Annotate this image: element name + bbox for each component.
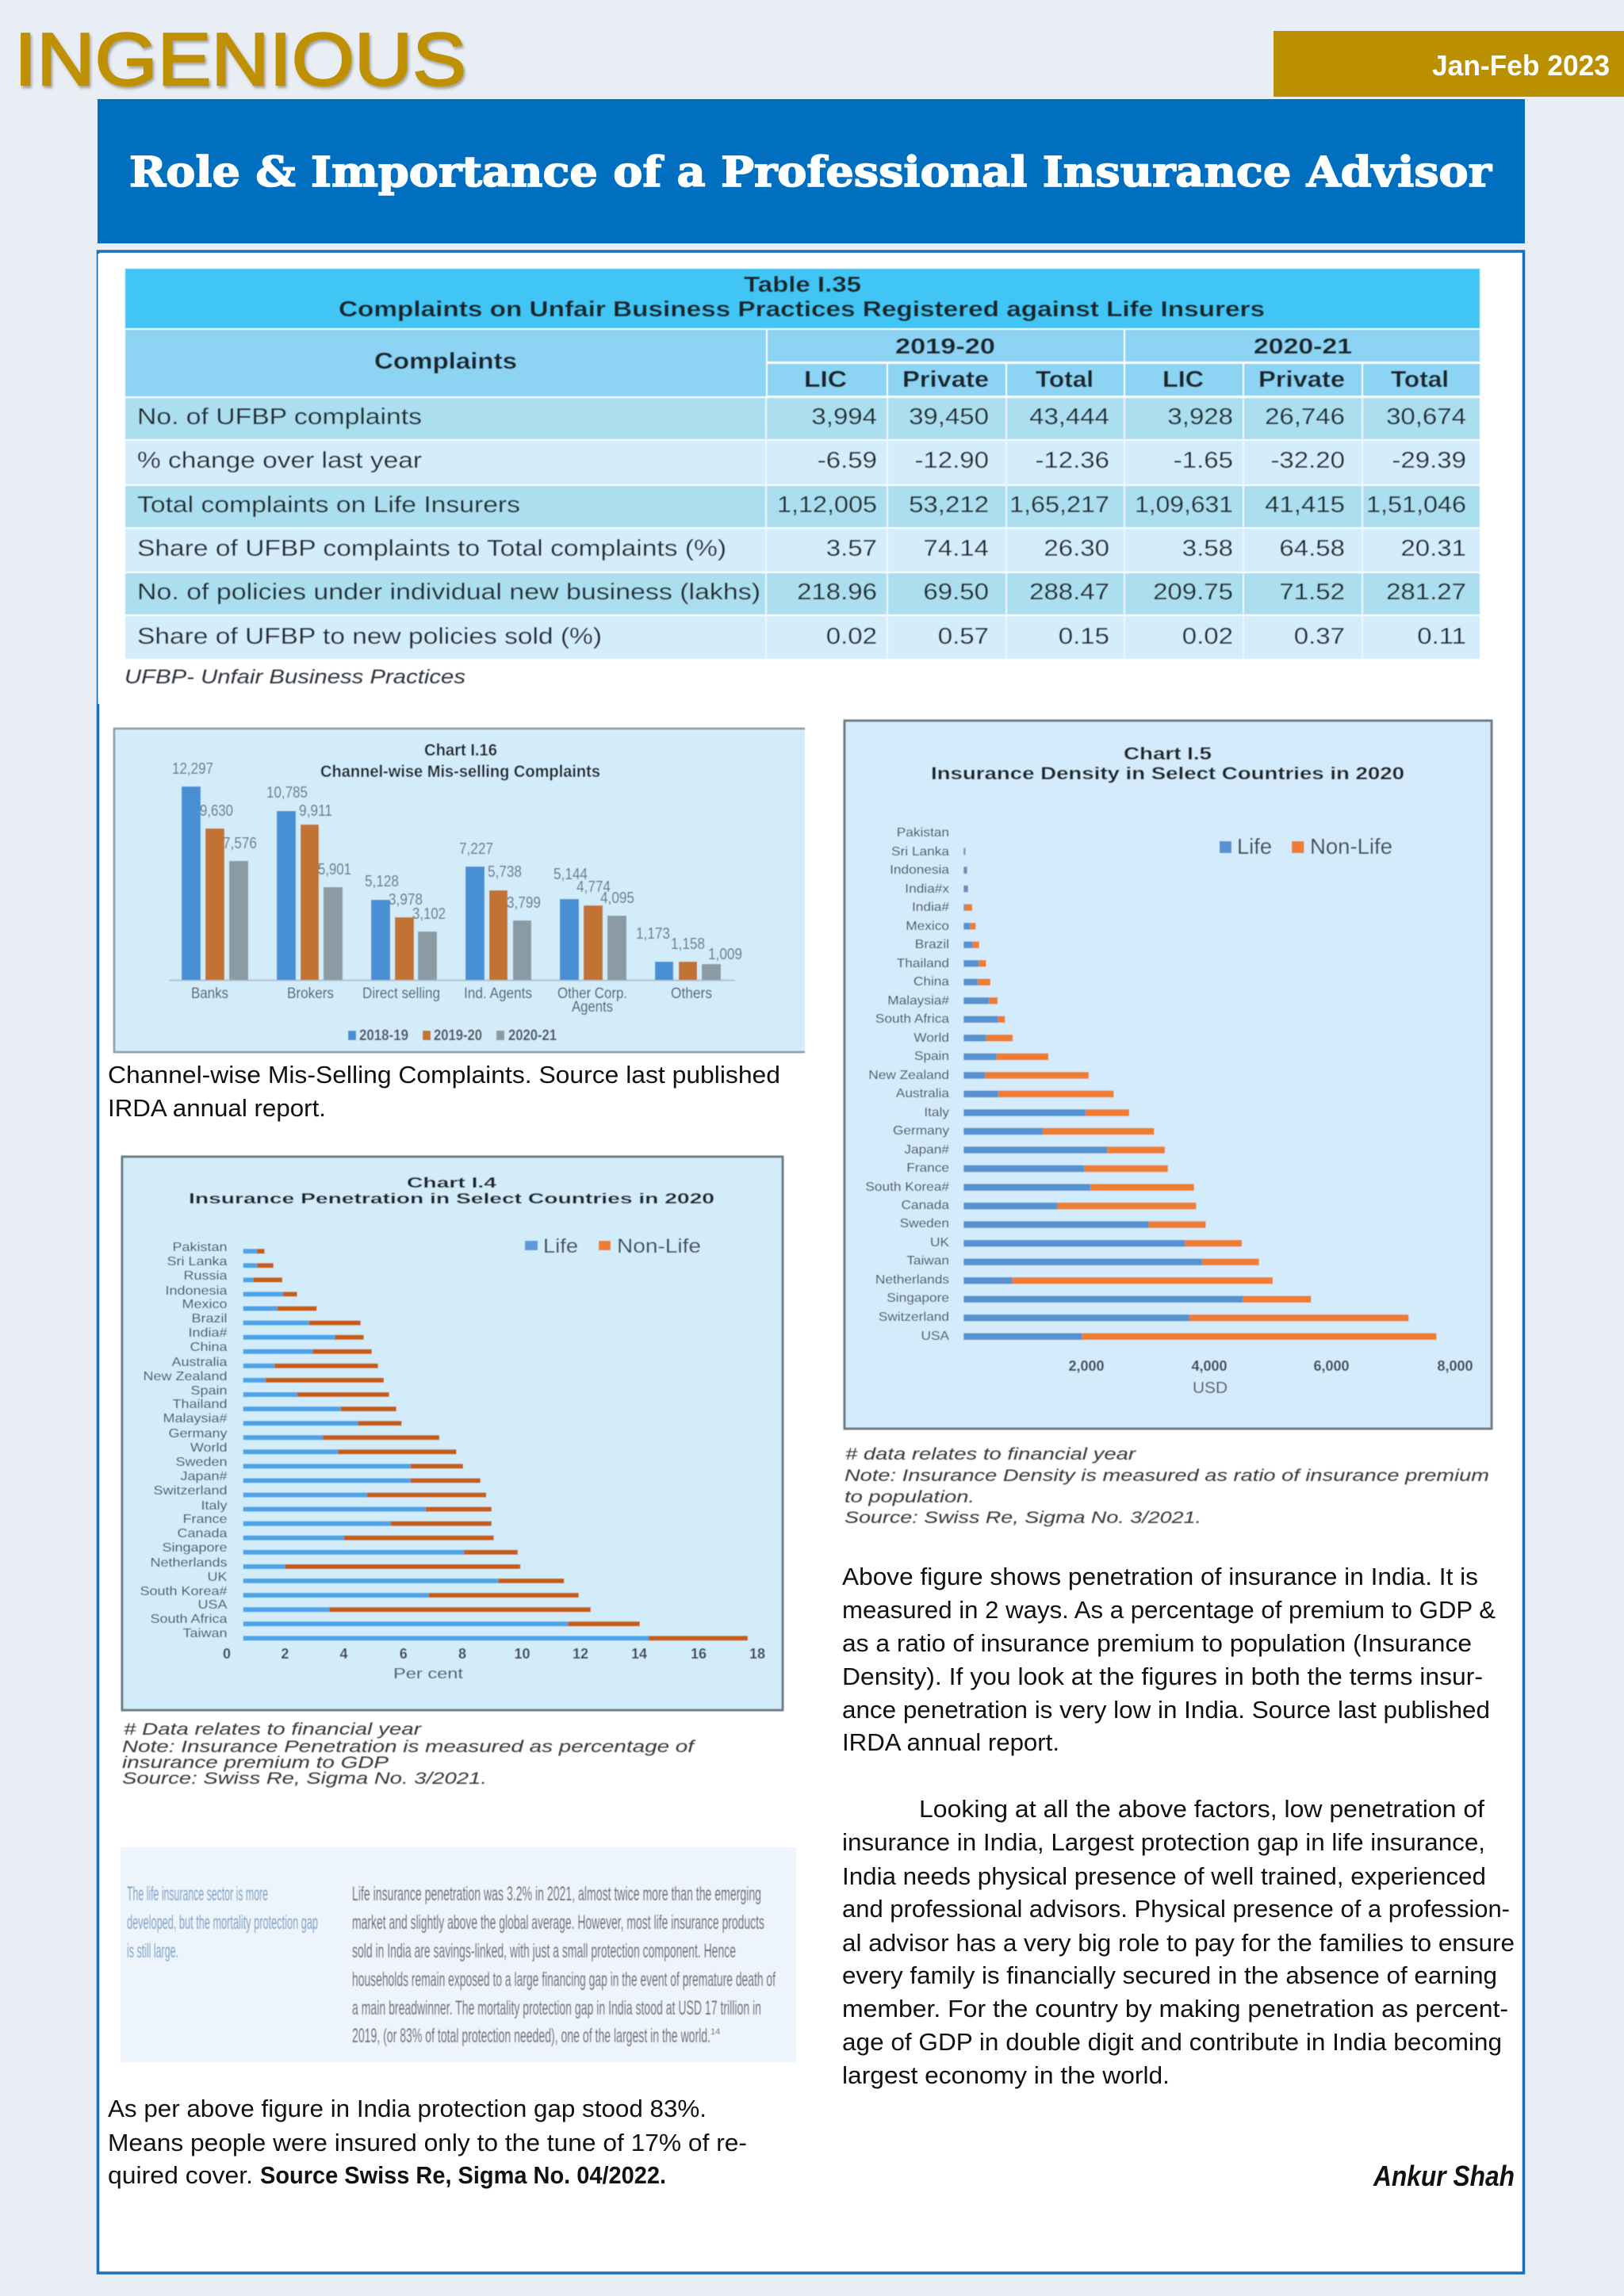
stacked bar chart: insurance penetration: 0 xyxy=(223,1646,231,1662)
table row: share of UFBP complaints: 3.58 xyxy=(1182,535,1233,561)
stacked bar chart: insurance penetration: China xyxy=(190,1340,228,1354)
table row: percent change: -1.65 xyxy=(1174,447,1233,473)
bar chart: channel-wise mis-selling complaints: 5,144 xyxy=(553,866,588,883)
stacked bar chart: insurance density: UK xyxy=(930,1235,949,1249)
table row: share of new policies: 0.57 xyxy=(938,623,989,649)
table: complaints on unfair business practices: LIC xyxy=(1162,367,1204,392)
table row: percent change xyxy=(137,447,1466,473)
table row: policies under new business: 281.27 xyxy=(1386,579,1466,604)
stacked bar chart: insurance penetration: USA xyxy=(198,1598,228,1612)
table row: UFBP complaints: 3,994 xyxy=(811,404,877,429)
table: complaints on unfair business practices xyxy=(124,269,1480,688)
table: complaints on unfair business practices: 2019-20 xyxy=(895,334,995,358)
table row: percent change: -32.20 xyxy=(1270,447,1345,473)
bar chart: channel-wise mis-selling complaints: Brokers xyxy=(287,985,334,1002)
stacked bar chart: insurance penetration: Switzerland xyxy=(154,1483,227,1498)
stacked bar chart: insurance penetration: Germany xyxy=(169,1426,228,1441)
stacked bar chart: insurance penetration: 18 xyxy=(749,1646,765,1662)
table row: share of UFBP complaints: 3.57 xyxy=(826,535,877,561)
body text: role of advisors: largest economy in the world. xyxy=(842,2061,1170,2089)
table: complaints on unfair business practices: Total xyxy=(1391,367,1449,392)
callout: protection gap excerpt: market and slightly above the global average. However, most life insurance products xyxy=(352,1911,764,1934)
stacked bar chart: insurance density: Sweden xyxy=(900,1216,949,1230)
notes: insurance density: to population. xyxy=(845,1488,975,1506)
table row: share of new policies xyxy=(137,623,1466,649)
stacked bar chart: insurance penetration: 6 xyxy=(400,1646,408,1662)
notes: insurance penetration: Note: Insurance Penetration is measured as percentage of xyxy=(122,1738,696,1756)
bar chart: channel-wise mis-selling complaints: 7,227 xyxy=(459,840,493,858)
table row: policies under new business xyxy=(137,579,1466,604)
stacked bar chart: insurance penetration: Taiwan xyxy=(183,1626,227,1640)
caption: protection gap: Source Swiss Re, Sigma No. 04/2022. xyxy=(260,2161,666,2189)
callout: protection gap excerpt: Life insurance penetration was 3.2% in 2021, almost twice more than the emerging xyxy=(352,1883,761,1905)
stacked bar chart: insurance density: Taiwan xyxy=(906,1253,949,1268)
table: complaints on unfair business practices: Complaints on Unfair Business Practices Registered against Life Insurers xyxy=(339,297,1265,321)
stacked bar chart: insurance density: 8,000 xyxy=(1437,1358,1473,1374)
table row: policies under new business: 288.47 xyxy=(1029,579,1109,604)
callout: protection gap excerpt: developed, but the mortality protection gap xyxy=(127,1911,318,1934)
bar chart: channel-wise mis-selling complaints: 3,978 xyxy=(389,891,423,909)
bar chart: channel-wise mis-selling complaints: Other Corp. xyxy=(557,985,627,1002)
stacked bar chart: insurance density: Spain xyxy=(914,1049,949,1063)
stacked bar chart: insurance density: Insurance Density in Select Countries in 2020 xyxy=(931,763,1404,783)
body text: role of advisors: and professional advisors. Physical presence of a profession- xyxy=(842,1895,1510,1923)
table footnote: UFBP- Unfair Business Practices xyxy=(124,666,465,688)
stacked bar chart: insurance penetration: Insurance Penetration in Select Countries in 2020 xyxy=(189,1191,714,1207)
stacked bar chart: insurance density: Japan# xyxy=(904,1142,950,1157)
stacked bar chart: insurance density: Switzerland xyxy=(879,1310,949,1324)
stacked bar chart: insurance penetration: 12 xyxy=(573,1646,588,1662)
table row: share of new policies: Share of UFBP to new policies sold (%) xyxy=(137,623,602,649)
issue date badge: Jan-Feb 2023 xyxy=(1432,49,1610,82)
callout: protection gap excerpt: The life insurance sector is more xyxy=(127,1883,268,1905)
stacked bar chart: insurance penetration: France xyxy=(183,1512,227,1526)
table row: percent change: -29.39 xyxy=(1392,447,1466,473)
stacked bar chart: insurance penetration: India# xyxy=(188,1326,228,1340)
stacked bar chart: insurance penetration: 2 xyxy=(281,1646,289,1662)
stacked bar chart: insurance penetration: Canada xyxy=(177,1526,228,1540)
table row: UFBP complaints: 39,450 xyxy=(909,404,989,429)
notes: insurance penetration: Source: Swiss Re, Sigma No. 3/2021. xyxy=(122,1770,487,1788)
table row: UFBP complaints: 43,444 xyxy=(1029,404,1109,429)
stacked bar chart: insurance penetration xyxy=(122,1157,783,1710)
stacked bar chart: insurance penetration: Brazil xyxy=(192,1311,227,1326)
stacked bar chart: insurance penetration: Pakistan xyxy=(173,1240,227,1254)
table row: policies under new business: No. of policies under individual new business (lakhs) xyxy=(137,579,760,604)
stacked bar chart: insurance density: Italy xyxy=(924,1105,950,1119)
table row: share of UFBP complaints: 74.14 xyxy=(923,535,989,561)
bar chart: channel-wise mis-selling complaints: 5,128 xyxy=(365,873,399,890)
bar chart: channel-wise mis-selling complaints: 12,297 xyxy=(172,760,213,778)
bar chart: channel-wise mis-selling complaints: 1,009 xyxy=(708,946,742,963)
stacked bar chart: insurance density: Malaysia# xyxy=(887,993,950,1008)
body text: role of advisors: member. For the country by making penetration as percent- xyxy=(842,1995,1508,2022)
stacked bar chart: insurance penetration: Singapore xyxy=(163,1540,227,1555)
table row: policies under new business: 218.96 xyxy=(797,579,877,604)
table row: total complaints: 1,51,046 xyxy=(1366,492,1466,517)
body text: penetration explanation: measured in 2 ways. As a percentage of premium to GDP & xyxy=(842,1596,1496,1624)
stacked bar chart: insurance penetration: 16 xyxy=(691,1646,707,1662)
masthead logo: INGENIOUS xyxy=(14,17,466,101)
stacked bar chart: insurance penetration: Life xyxy=(543,1235,578,1257)
table row: share of new policies: 0.02 xyxy=(826,623,877,649)
table: complaints on unfair business practices: LIC xyxy=(804,367,847,392)
table row: percent change: -12.36 xyxy=(1035,447,1109,473)
body text: role of advisors: Looking at all the above factors, low penetration of xyxy=(919,1795,1484,1823)
table row: UFBP complaints: No. of UFBP complaints xyxy=(137,404,422,429)
stacked bar chart: insurance penetration: Netherlands xyxy=(151,1556,227,1570)
caption: protection gap: As per above figure in India protection gap stood 83%. xyxy=(108,2095,707,2122)
bar chart: channel-wise mis-selling complaints: 7,576 xyxy=(223,835,257,852)
stacked bar chart: insurance penetration: Sri Lanka xyxy=(167,1254,228,1269)
stacked bar chart: insurance penetration: 14 xyxy=(631,1646,647,1662)
caption: protection gap: quired cover. xyxy=(108,2161,253,2189)
body text: role of advisors xyxy=(842,1795,1515,2089)
stacked bar chart: insurance penetration: Non-Life xyxy=(617,1235,701,1257)
callout: protection gap excerpt: sold in India are savings-linked, with just a small protection component. Hence xyxy=(352,1940,736,1962)
table: complaints on unfair business practices: 2020-21 xyxy=(1254,334,1352,358)
stacked bar chart: insurance density: Life xyxy=(1237,834,1272,859)
table row: share of UFBP complaints: 26.30 xyxy=(1044,535,1109,561)
notes: insurance density: Note: Insurance Density is measured as ratio of insurance premium xyxy=(845,1467,1489,1485)
table row: share of new policies: 0.15 xyxy=(1059,623,1109,649)
stacked bar chart: insurance penetration: Mexico xyxy=(182,1297,227,1311)
body text: penetration explanation: Density). If you look at the figures in both the terms insur- xyxy=(842,1663,1483,1690)
stacked bar chart: insurance penetration: 10 xyxy=(514,1646,530,1662)
stacked bar chart: insurance penetration: South Africa xyxy=(151,1612,228,1626)
bar chart: channel-wise mis-selling complaints: 3,799 xyxy=(507,894,541,912)
table row: UFBP complaints: 3,928 xyxy=(1167,404,1233,429)
stacked bar chart: insurance density: Thailand xyxy=(897,956,949,970)
table row: share of UFBP complaints: 20.31 xyxy=(1400,535,1466,561)
stacked bar chart: insurance penetration: 4 xyxy=(339,1646,348,1662)
notes: insurance penetration: insurance premium to GDP xyxy=(122,1754,389,1772)
stacked bar chart: insurance density: Pakistan xyxy=(897,825,949,840)
stacked bar chart: insurance density: India#x xyxy=(905,882,950,896)
stacked bar chart: insurance penetration: World xyxy=(190,1441,227,1455)
stacked bar chart: insurance penetration: Spain xyxy=(190,1383,227,1398)
callout: protection gap excerpt: 14 xyxy=(710,2027,720,2037)
stacked bar chart: insurance penetration: Malaysia# xyxy=(163,1411,228,1425)
table row: share of UFBP complaints: 64.58 xyxy=(1279,535,1345,561)
stacked bar chart: insurance penetration: South Korea# xyxy=(140,1584,228,1598)
callout: protection gap excerpt: households remain exposed to a large financing gap in the event of premature death of xyxy=(352,1969,776,1991)
bar chart: channel-wise mis-selling complaints: 3,102 xyxy=(412,905,446,923)
bar chart: channel-wise mis-selling complaints: Others xyxy=(671,985,712,1002)
stacked bar chart: insurance penetration: 8 xyxy=(458,1646,466,1662)
bar chart: channel-wise mis-selling complaints: 2018-19 xyxy=(359,1027,408,1044)
body text: role of advisors: India needs physical presence of well trained, experienced xyxy=(842,1862,1486,1890)
stacked bar chart: insurance density: 2,000 xyxy=(1068,1358,1105,1374)
stacked bar chart: insurance density: France xyxy=(906,1161,949,1175)
bar chart: channel-wise mis-selling complaints: 1,158 xyxy=(671,936,705,953)
stacked bar chart: insurance density xyxy=(845,721,1492,1429)
stacked bar chart: insurance density: 6,000 xyxy=(1313,1358,1350,1374)
table: complaints on unfair business practices: Complaints xyxy=(374,349,517,374)
table row: policies under new business: 71.52 xyxy=(1279,579,1345,604)
bar chart: channel-wise mis-selling complaints xyxy=(114,729,805,1052)
caption: protection gap: Means people were insured only to the tune of 17% of re- xyxy=(108,2129,747,2156)
body text: penetration explanation: IRDA annual report. xyxy=(842,1728,1059,1756)
table row: UFBP complaints xyxy=(137,404,1466,429)
table row: percent change: % change over last year xyxy=(137,447,422,473)
bar chart: channel-wise mis-selling complaints: 9,630 xyxy=(200,802,233,820)
notes: insurance density xyxy=(845,1445,1489,1527)
callout: protection gap excerpt: a main breadwinner. The mortality protection gap in India stood at USD 17 trillion in xyxy=(352,1997,761,2019)
body text: penetration explanation: as a ratio of insurance premium to population (Insurance xyxy=(842,1629,1472,1657)
issue date badge xyxy=(1274,31,1624,97)
bar chart: channel-wise mis-selling complaints: 5,901 xyxy=(318,861,351,878)
table row: total complaints: 1,09,631 xyxy=(1135,492,1233,517)
table row: total complaints xyxy=(137,492,1466,517)
stacked bar chart: insurance density: Singapore xyxy=(887,1291,949,1305)
body text: penetration explanation: ance penetration is very low in India. Source last published xyxy=(842,1696,1490,1724)
bar chart: channel-wise mis-selling complaints: Chart I.16 xyxy=(424,741,497,760)
stacked bar chart: insurance penetration: Sweden xyxy=(175,1455,227,1469)
title banner xyxy=(98,99,1525,243)
bar chart: channel-wise mis-selling complaints: 2020-21 xyxy=(508,1027,557,1044)
table: complaints on unfair business practices: Total xyxy=(1036,367,1094,392)
bar chart: channel-wise mis-selling complaints: Channel-wise Mis-selling Complaints xyxy=(320,763,600,781)
title banner: Role & Importance of a Professional Insurance Advisor xyxy=(129,148,1492,197)
stacked bar chart: insurance density: New Zealand xyxy=(868,1068,949,1082)
stacked bar chart: insurance density: 4,000 xyxy=(1191,1358,1228,1374)
stacked bar chart: insurance density: India# xyxy=(912,900,950,914)
stacked bar chart: insurance density: South Africa xyxy=(875,1012,950,1026)
stacked bar chart: insurance density: Non-Life xyxy=(1310,834,1392,859)
stacked bar chart: insurance density: World xyxy=(914,1031,949,1045)
stacked bar chart: insurance penetration: Per cent xyxy=(393,1666,463,1682)
table row: share of new policies: 0.37 xyxy=(1294,623,1345,649)
table row: UFBP complaints: 26,746 xyxy=(1265,404,1345,429)
stacked bar chart: insurance density: USA xyxy=(921,1329,950,1343)
bar chart: channel-wise mis-selling complaints: 5,738 xyxy=(488,863,522,881)
stacked bar chart: insurance density: South Korea# xyxy=(865,1180,950,1194)
stacked bar chart: insurance penetration: Japan# xyxy=(180,1469,228,1483)
body text: role of advisors: age of GDP in double digit and contribute in India becoming xyxy=(842,2028,1502,2056)
table row: UFBP complaints: 30,674 xyxy=(1386,404,1466,429)
caption: protection gap xyxy=(108,2095,747,2189)
stacked bar chart: insurance density: Netherlands xyxy=(875,1272,949,1287)
notes: insurance penetration: # Data relates to financial year xyxy=(124,1720,422,1739)
stacked bar chart: insurance density: USD xyxy=(1193,1380,1228,1397)
bar chart: channel-wise mis-selling complaints: 2019-20 xyxy=(434,1027,482,1044)
body text: role of advisors: insurance in India, Largest protection gap in life insurance, xyxy=(842,1828,1485,1856)
callout: protection gap excerpt xyxy=(121,1847,796,2062)
table row: total complaints: Total complaints on Life Insurers xyxy=(137,492,520,517)
caption: mis-selling chart: IRDA annual report. xyxy=(108,1094,326,1122)
bar chart: channel-wise mis-selling complaints: 10,785 xyxy=(266,784,308,802)
stacked bar chart: insurance density: Brazil xyxy=(915,937,949,951)
callout: protection gap excerpt: is still large. xyxy=(127,1940,178,1962)
table row: share of UFBP complaints xyxy=(137,535,1466,561)
table row: total complaints: 1,12,005 xyxy=(777,492,877,517)
stacked bar chart: insurance penetration: Chart I.4 xyxy=(407,1175,496,1191)
table: complaints on unfair business practices: Private xyxy=(902,367,989,392)
stacked bar chart: insurance density: Indonesia xyxy=(890,863,950,877)
table: complaints on unfair business practices: Private xyxy=(1258,367,1345,392)
body text: role of advisors: al advisor has a very big role to pay for the families to ensure xyxy=(842,1929,1515,1957)
bar chart: channel-wise mis-selling complaints: Agents xyxy=(572,999,613,1016)
bar chart: channel-wise mis-selling complaints: 4,095 xyxy=(600,890,634,907)
stacked bar chart: insurance penetration: Italy xyxy=(201,1498,228,1513)
stacked bar chart: insurance density: Canada xyxy=(902,1198,950,1212)
bar chart: channel-wise mis-selling complaints: Banks xyxy=(191,985,228,1002)
stacked bar chart: insurance penetration: UK xyxy=(208,1570,228,1584)
body text: penetration explanation xyxy=(842,1563,1496,1756)
bar chart: channel-wise mis-selling complaints: 1,173 xyxy=(636,925,670,943)
bar chart: channel-wise mis-selling complaints: Direct selling xyxy=(362,985,440,1002)
body text: role of advisors: every family is financially secured in the absence of earning xyxy=(842,1961,1497,1989)
stacked bar chart: insurance density: Australia xyxy=(896,1086,950,1100)
stacked bar chart: insurance penetration: Indonesia xyxy=(165,1284,228,1298)
bar chart: channel-wise mis-selling complaints: 4,774 xyxy=(576,878,611,896)
stacked bar chart: insurance density: Sri Lanka xyxy=(891,844,950,859)
stacked bar chart: insurance penetration: New Zealand xyxy=(144,1369,227,1383)
stacked bar chart: insurance density: Chart I.5 xyxy=(1124,744,1212,763)
author signature: Ankur Shah xyxy=(1373,2160,1515,2192)
table row: percent change: -12.90 xyxy=(914,447,989,473)
bar chart: channel-wise mis-selling complaints: Ind. Agents xyxy=(464,985,532,1002)
table: complaints on unfair business practices: Table I.35 xyxy=(744,272,861,297)
stacked bar chart: insurance density: Mexico xyxy=(906,919,949,933)
stacked bar chart: insurance penetration: Thailand xyxy=(172,1397,227,1411)
table row: total complaints: 41,415 xyxy=(1265,492,1345,517)
table row: percent change: -6.59 xyxy=(818,447,877,473)
body text: penetration explanation: Above figure shows penetration of insurance in India. It is xyxy=(842,1563,1478,1590)
callout: protection gap excerpt: 2019, (or 83% of total protection needed), one of the largest in the world. xyxy=(352,2025,710,2047)
table row: total complaints: 1,65,217 xyxy=(1009,492,1109,517)
table row: share of new policies: 0.11 xyxy=(1417,623,1466,649)
bar chart: channel-wise mis-selling complaints: 9,911 xyxy=(299,802,332,820)
main content panel xyxy=(98,251,1524,2273)
caption: mis-selling chart: Channel-wise Mis-Selling Complaints. Source last published xyxy=(108,1061,780,1089)
stacked bar chart: insurance density: Germany xyxy=(893,1123,950,1138)
table row: total complaints: 53,212 xyxy=(909,492,989,517)
table row: share of new policies: 0.02 xyxy=(1182,623,1233,649)
stacked bar chart: insurance penetration: Russia xyxy=(184,1269,228,1283)
notes: insurance penetration xyxy=(122,1720,696,1788)
notes: insurance density: # data relates to financial year xyxy=(845,1445,1136,1464)
table row: policies under new business: 209.75 xyxy=(1153,579,1233,604)
stacked bar chart: insurance density: China xyxy=(914,974,950,989)
table row: policies under new business: 69.50 xyxy=(923,579,989,604)
stacked bar chart: insurance penetration: Australia xyxy=(172,1355,228,1369)
table row: share of UFBP complaints: Share of UFBP complaints to Total complaints (%) xyxy=(137,535,726,561)
notes: insurance density: Source: Swiss Re, Sigma No. 3/2021. xyxy=(845,1509,1201,1527)
caption: mis-selling chart xyxy=(108,1061,780,1122)
